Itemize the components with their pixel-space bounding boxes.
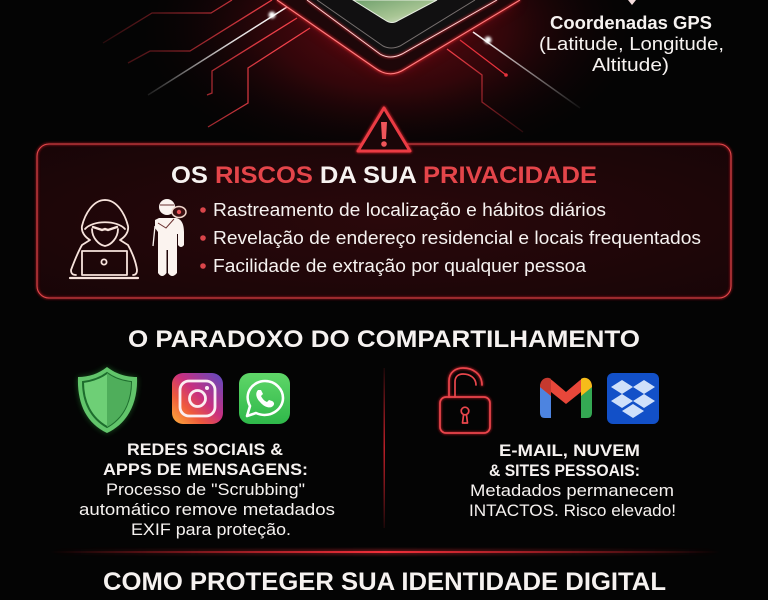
heading: protect identity: COMO PROTEGER SUA IDENTIDADE DIGITAL bbox=[103, 568, 666, 596]
bullet list bbox=[200, 200, 701, 276]
text block: social networks: REDES SOCIAIS & bbox=[127, 441, 283, 459]
pin marker bbox=[628, 0, 636, 5]
bullet list: Rastreamento de localização e hábitos diários bbox=[213, 200, 606, 220]
section divider bbox=[50, 549, 720, 555]
gps caption bbox=[539, 13, 724, 75]
icon: hacker bbox=[70, 200, 138, 278]
text block: social networks: APPS DE MENSAGENS: bbox=[103, 461, 308, 479]
icon: instagram bbox=[172, 373, 223, 424]
icon: whatsapp bbox=[239, 373, 290, 424]
text block: social networks: automático remove metadados bbox=[79, 501, 335, 519]
text block: social networks bbox=[79, 441, 335, 539]
panel: privacy risks bbox=[37, 144, 731, 298]
icon: open padlock bbox=[440, 368, 490, 433]
heading: sharing paradox: O PARADOXO DO COMPARTILHAMENTO bbox=[128, 326, 640, 353]
gps caption: Coordenadas GPS bbox=[550, 13, 712, 33]
column divider bbox=[384, 368, 385, 528]
icon: gmail bbox=[540, 378, 592, 418]
circuit lines right bbox=[447, 32, 580, 132]
bullet list: Facilidade de extração por qualquer pessoa bbox=[213, 256, 587, 276]
icon: surveillance person bbox=[153, 199, 186, 276]
text block: email and cloud bbox=[469, 442, 676, 520]
gps caption: (Latitude, Longitude, bbox=[539, 34, 724, 54]
icon: warning triangle bbox=[358, 108, 410, 151]
text block: email and cloud: E-MAIL, NUVEM bbox=[499, 442, 640, 460]
text block: email and cloud: INTACTOS. Risco elevado! bbox=[469, 502, 676, 520]
gps caption: Altitude) bbox=[592, 55, 669, 75]
text block: social networks: Processo de "Scrubbing" bbox=[106, 481, 305, 499]
heading: risks: OS RISCOS DA SUA PRIVACIDADE bbox=[171, 162, 597, 189]
icon: green shield bbox=[78, 367, 137, 433]
text block: social networks: EXIF para proteção. bbox=[131, 521, 291, 539]
bullet list: Revelação de endereço residencial e locais frequentados bbox=[213, 228, 701, 248]
device: phone corner with map bbox=[277, 0, 520, 74]
text block: email and cloud: Metadados permanecem bbox=[470, 482, 674, 500]
circuit lines left bbox=[103, 0, 310, 127]
text block: email and cloud: & SITES PESSOAIS: bbox=[489, 462, 640, 480]
icon: dropbox bbox=[607, 373, 659, 424]
